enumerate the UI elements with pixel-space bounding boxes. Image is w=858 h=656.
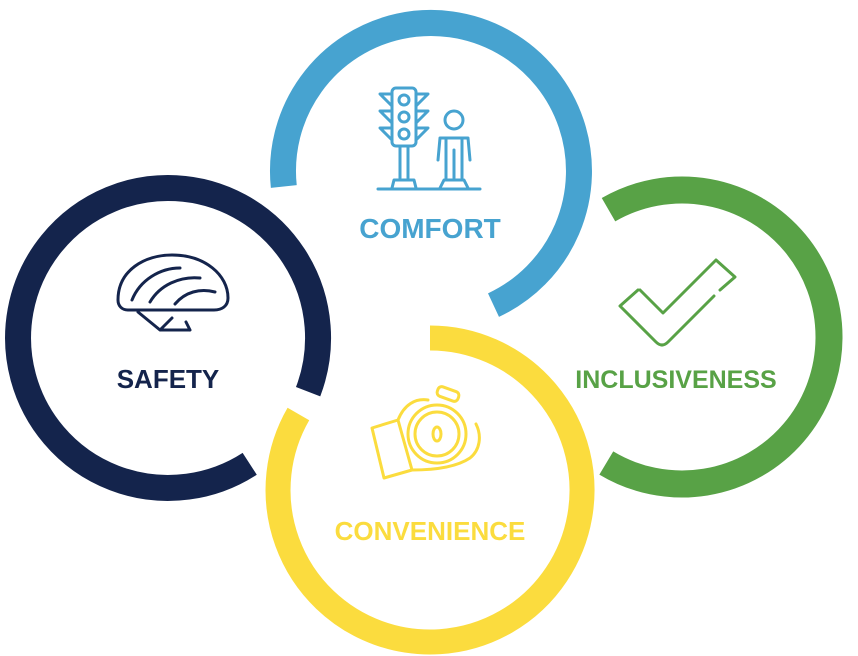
ring: inclusiveness — [606, 190, 829, 484]
heading: safety: SAFETY — [117, 364, 219, 394]
icon: check mark — [620, 260, 735, 345]
ring: convenience — [278, 338, 582, 642]
heading: convenience: CONVENIENCE — [335, 516, 525, 546]
ring: comfort — [283, 23, 579, 305]
ring: safety — [18, 188, 318, 488]
heading: inclusiveness: INCLUSIVENESS — [575, 366, 777, 394]
icon: stopwatch in hand — [372, 386, 479, 478]
heading: comfort: COMFORT — [359, 213, 501, 244]
icon: traffic light and pedestrian — [378, 88, 480, 189]
icon: bike helmet — [118, 255, 228, 330]
